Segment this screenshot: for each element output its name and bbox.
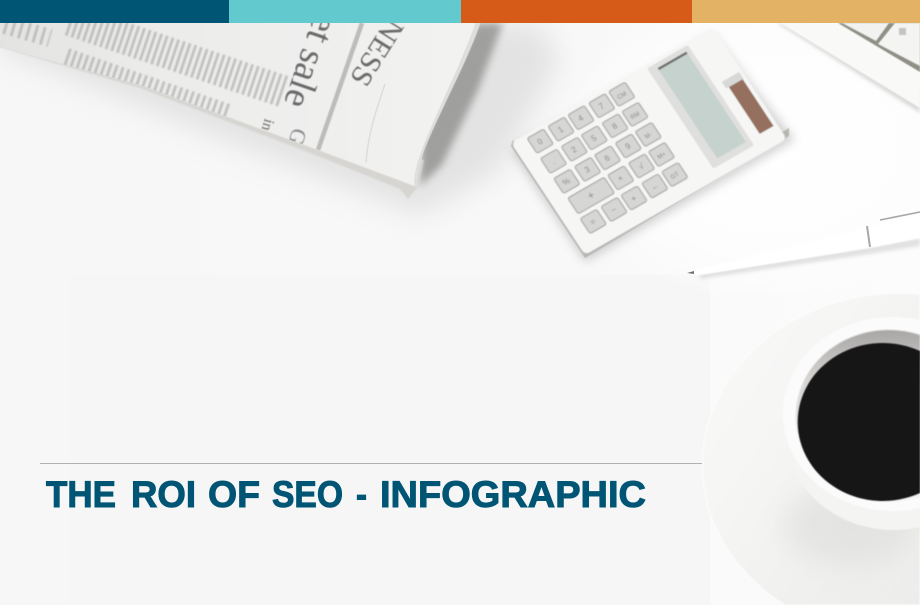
calculator keys: × — [616, 174, 625, 184]
photo: coffee cup and saucer — [702, 293, 920, 605]
calculator keys: + — [629, 194, 639, 204]
newspaper headline words: G — [284, 126, 312, 148]
calculator keys: CM — [617, 91, 628, 101]
calculator keys: 9 — [624, 141, 633, 151]
calculator keys: 2 — [570, 145, 579, 155]
curled page edge — [417, 23, 478, 187]
photo: keyboard corner — [777, 23, 920, 113]
calculator keys: ← — [649, 181, 661, 192]
calculator keys: RM — [630, 112, 641, 121]
calculator keys: − — [609, 205, 619, 215]
calculator keys: 4 — [576, 113, 586, 123]
newspaper text columns — [5, 20, 285, 114]
title: SEO — [272, 473, 343, 515]
calculator keys: 8 — [611, 121, 620, 131]
solar panel — [729, 79, 774, 134]
coffee — [798, 343, 920, 501]
calculator keys: M- — [644, 132, 654, 141]
calculator keys: √ — [637, 162, 646, 172]
divider rule — [40, 462, 702, 464]
title — [46, 473, 646, 515]
saucer — [702, 293, 920, 605]
calculator keys: + — [585, 189, 598, 203]
title: INFOGRAPHIC — [380, 473, 646, 515]
photo: folded newspaper — [0, 9, 503, 199]
calculator keys: 3 — [583, 165, 592, 175]
calculator keys: GT — [670, 172, 681, 181]
calculator keys: 5 — [590, 133, 599, 143]
calculator keys: = — [589, 217, 598, 227]
newspaper headline words: NESS — [343, 12, 410, 92]
calculator keys: 7 — [597, 101, 607, 111]
calculator keys: 6 — [603, 153, 612, 163]
title: - — [356, 473, 367, 515]
calculator keys: M+ — [657, 152, 668, 161]
cup rim — [783, 317, 920, 511]
title: THE — [46, 473, 116, 515]
calculator keys: 1 — [557, 125, 566, 135]
calculator keys: 0 — [536, 137, 545, 147]
cup body — [785, 334, 920, 530]
calculator keys: % — [561, 176, 572, 187]
masthead rule — [318, 23, 362, 150]
title: ROI — [131, 473, 196, 515]
photo: pen — [687, 212, 920, 279]
newspaper headline words: et sale — [275, 9, 346, 114]
calculator keys: . — [550, 158, 557, 166]
newspaper headline words: in — [258, 117, 276, 133]
calculator keys — [527, 82, 688, 234]
title: OF — [208, 473, 260, 515]
photo: calculator — [511, 27, 795, 262]
color bar header — [0, 0, 920, 23]
newspaper headline words — [261, 23, 404, 144]
photo: desk shadow around newspaper — [0, 23, 560, 215]
calculator display housing — [647, 45, 754, 169]
calculator display — [658, 52, 746, 158]
